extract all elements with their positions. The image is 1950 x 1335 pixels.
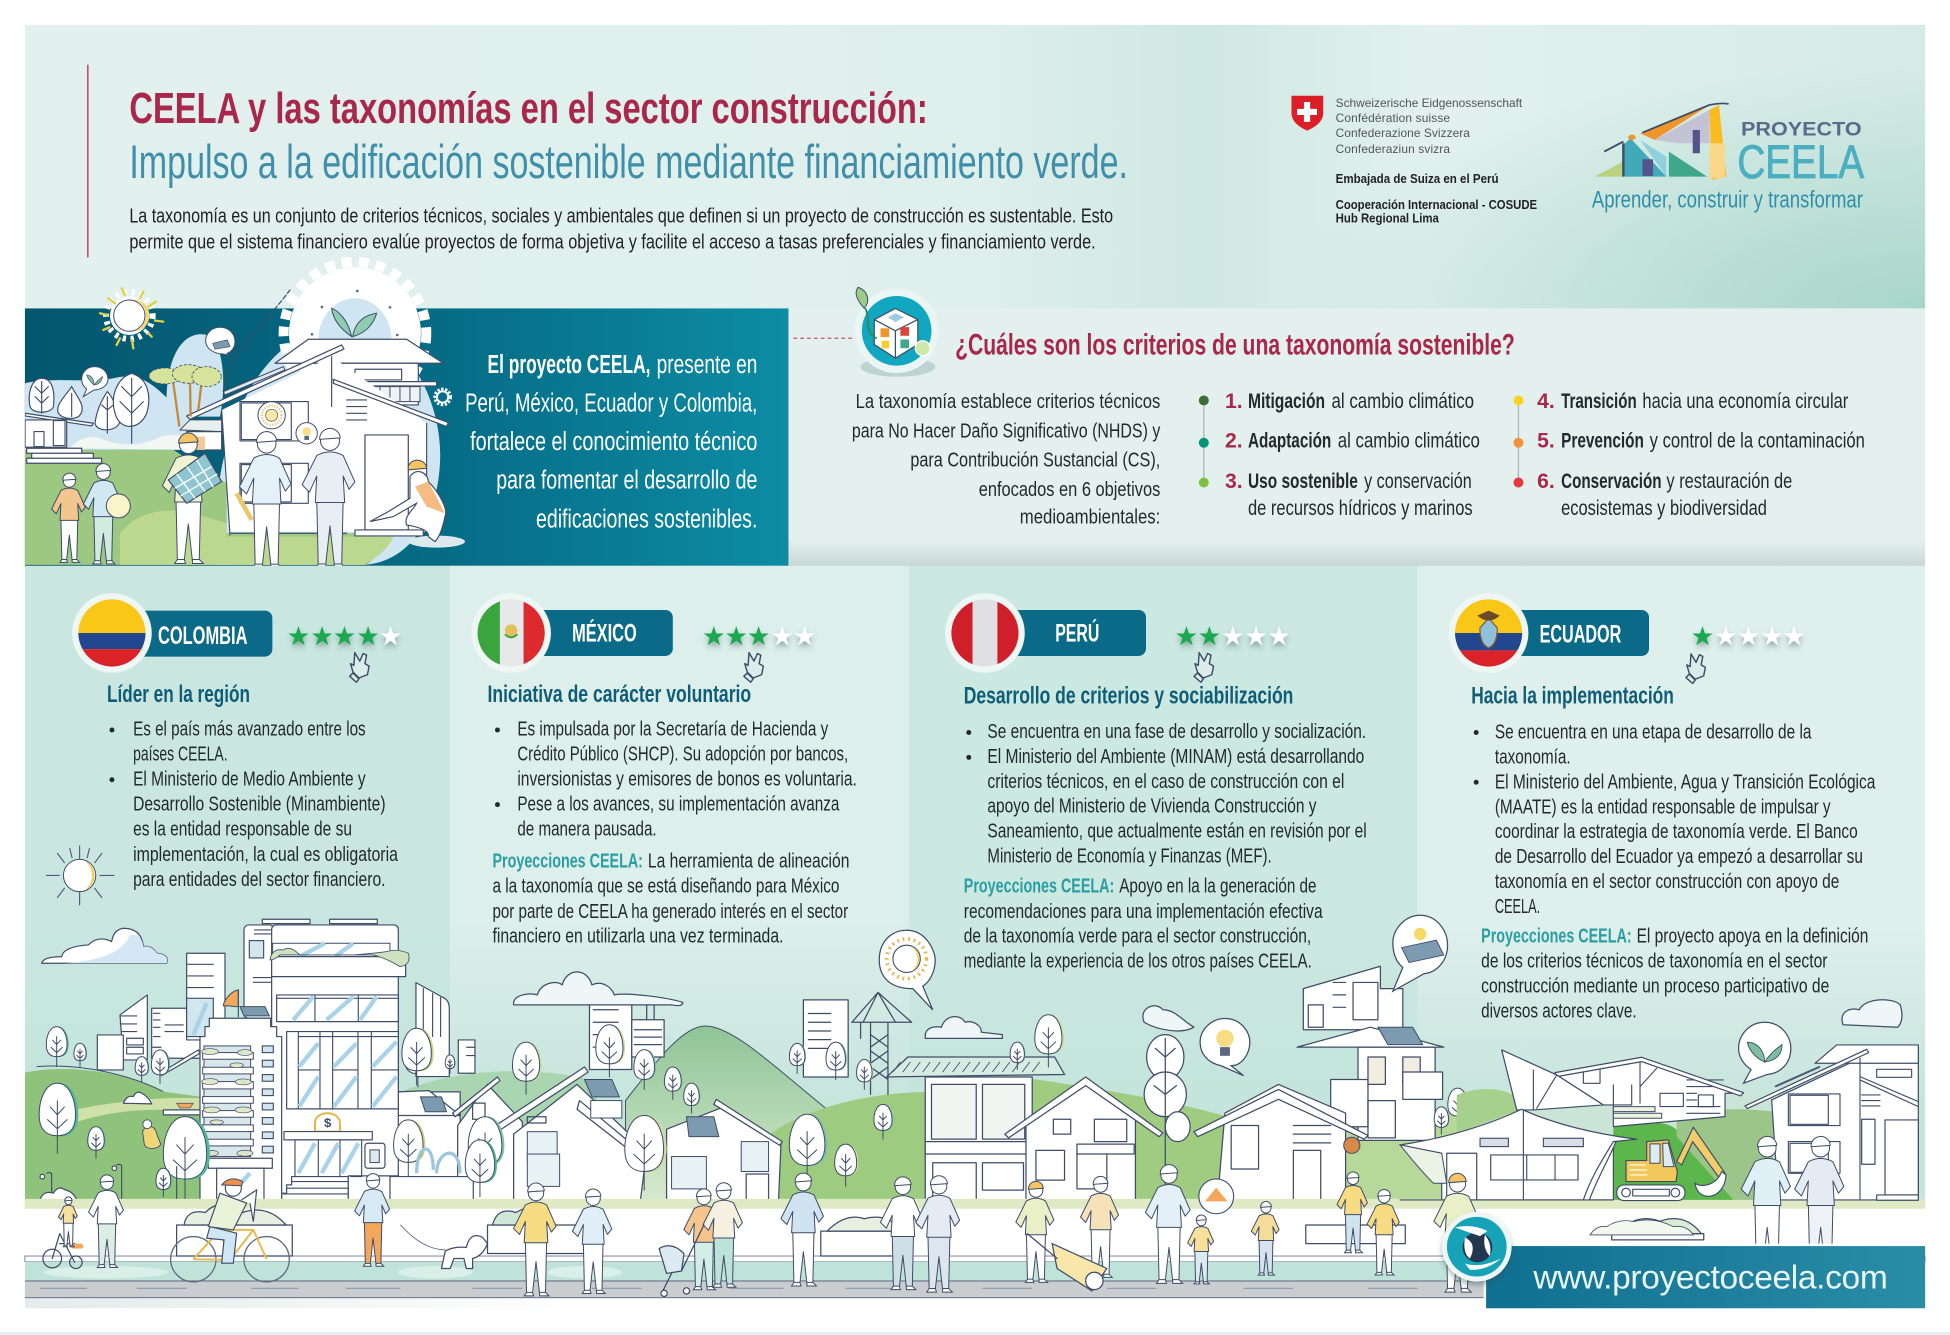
cyclist [171, 1179, 289, 1282]
list: objectives 4 to 6: hacia una economía circular [1642, 390, 1848, 413]
left small house and bricks [25, 413, 93, 426]
text: Ecuador projections [1481, 926, 1868, 1022]
list: objectives 4 to 6: ecosistemas y biodiversidad [1561, 497, 1767, 520]
heading: CEELA project description: fortalece el conocimiento técnico [470, 426, 757, 456]
small gear [435, 389, 451, 405]
connector dashed line [793, 337, 856, 339]
sun: Colombia column [46, 846, 114, 905]
logo: Swiss confederation: Confederazione Svizzera [1336, 126, 1470, 140]
pill: Perú [995, 610, 1146, 656]
text: Perú projections [964, 876, 1323, 973]
background skyline center [589, 992, 912, 1094]
text: Colombia bullets: para entidades del sector financiero. [133, 869, 386, 891]
list: objectives 1 to 3: de recursos hídricos y marinos [1248, 497, 1473, 520]
text: criteria introduction: para No Hacer Daño Significativo (NHDS) y [852, 420, 1161, 443]
text: criteria introduction: La taxonomía establece criterios técnicos [856, 390, 1160, 413]
speech bubbles [206, 327, 235, 356]
building with solar roof [1297, 966, 1444, 1140]
pill: México: MÉXICO [572, 619, 637, 648]
green fields [1613, 1122, 1733, 1200]
heading: criteria question: ¿Cuáles son los criterios de una taxonomía sostenible? [955, 328, 1515, 361]
text: Colombia bullets: implementación, la cual es obligatoria [133, 844, 399, 866]
left trees [29, 373, 149, 430]
text: Colombia bullets: Es el país más avanzado entre los [133, 719, 366, 741]
list: objectives 4 to 6: Prevención [1561, 430, 1644, 453]
worker with panel [162, 432, 204, 564]
speech bubble: seedling [1739, 1022, 1791, 1083]
footer: website bar [1484, 1244, 1925, 1308]
text: México bullets: de manera pausada. [517, 819, 657, 841]
heading: CEELA project description [465, 349, 757, 533]
heading: Ecuador: Hacia la implementación [1471, 683, 1674, 709]
list: objectives 1 to 3: Uso sostenible [1248, 470, 1358, 493]
houses center [398, 1067, 782, 1200]
sidewalk and street [25, 1199, 1925, 1308]
rating: one of five stars [1692, 626, 1804, 645]
icon: pointer hand [1686, 654, 1705, 683]
text: Colombia bullets: El Ministerio de Medio Ambiente y [133, 769, 366, 791]
text: Colombia bullets: es la entidad responsable de su [133, 819, 352, 841]
flag: Perú [945, 593, 1025, 673]
list: objectives 1 to 3: 1. [1225, 390, 1243, 413]
logo: Proyecto CEELA: PROYECTO [1741, 120, 1862, 141]
text: Perú projections: recomendaciones para una implementación efectiva [964, 901, 1323, 923]
list: objectives 4 to 6: Transición [1561, 390, 1637, 413]
logo: Swiss confederation: Confédération suisse [1336, 111, 1450, 125]
sun [110, 296, 149, 335]
heading: México: Iniciativa de carácter voluntario [488, 682, 751, 708]
distant skyline [120, 995, 147, 1060]
dog [400, 1225, 488, 1268]
fin building [416, 983, 449, 1077]
text: Ecuador bullets: (MAATE) es la entidad responsable de impulsar y [1495, 796, 1831, 818]
text: Ecuador bullets: CEELA. [1495, 896, 1540, 918]
text: México projections: por parte de CEELA ha generado interés en el sector [492, 901, 848, 923]
list: objectives 4 to 6: 4. [1537, 390, 1555, 413]
family [52, 473, 85, 562]
gear [288, 267, 421, 372]
text: Perú bullets [966, 721, 1367, 868]
text: Perú projections: Apoyo en la la generación de [1119, 876, 1316, 898]
footer: website bar: www.proyectoceela.com [1532, 1259, 1888, 1296]
clouds center [514, 972, 1902, 1038]
title block: Impulso a la edificación sostenible mediante financiamiento verde. [129, 136, 1128, 189]
list: objectives 4 to 6 [1513, 390, 1865, 520]
icon: pointer hand [350, 653, 369, 682]
front house [1400, 1109, 1637, 1200]
logo: Proyecto CEELA [1592, 103, 1865, 214]
text: criteria introduction [852, 390, 1161, 529]
text: México bullets: Crédito Público (SHCP). Su adopción por bancos, [517, 744, 848, 766]
icon: hands holding globe [1442, 1212, 1512, 1282]
street lamps [47, 1164, 177, 1207]
text: Perú bullets: Ministerio de Economía y Finanzas (MEF). [987, 846, 1272, 868]
rating: two of five stars [1176, 626, 1289, 645]
title block: La taxonomía es un conjunto de criterios técnicos, sociales y ambientales que definen si un proyecto de construcción es sustentable. Esto [129, 205, 1113, 228]
title block [129, 85, 1128, 254]
icon: pointer hand [1194, 653, 1214, 682]
child on tricycle [43, 1197, 83, 1268]
text: Perú projections: de la taxonomía verde para el sector construcción, [964, 926, 1311, 948]
illustration: right neighbourhood [1400, 1045, 1918, 1235]
cloud [42, 928, 167, 963]
speech bubble: light bulb [1200, 1019, 1250, 1076]
rating: four of five stars [288, 626, 401, 645]
title block: permite que el sistema financiero evalúe proyectos de forma objetiva y facilite el acceso a tasas preferenciales y financiamiento verde. [129, 231, 1096, 254]
text: Colombia bullets [109, 719, 399, 891]
fountain [417, 1149, 460, 1173]
bushes on grass [123, 1092, 152, 1104]
list: objectives 1 to 3: 3. [1225, 470, 1243, 493]
text: México projections: La herramienta de alineación [648, 851, 849, 873]
logo: Swiss confederation: Hub Regional Lima [1336, 212, 1439, 226]
text: Ecuador bullets: coordinar la estrategia de taxonomía verde. El Banco [1495, 821, 1858, 843]
speech bubble: sun [879, 930, 935, 1010]
list: objectives 1 to 3: al cambio climático [1338, 430, 1480, 453]
palm trees [173, 382, 202, 427]
list: objectives 4 to 6: y restauración de [1666, 470, 1792, 493]
logo: Proyecto CEELA: Aprender, construir y transformar [1592, 188, 1863, 214]
trees scattered center [404, 1015, 1469, 1200]
list: objectives 4 to 6: y control de la contaminación [1650, 430, 1865, 453]
text: Perú bullets: apoyo del Ministerio de Vivienda Construcción y [987, 796, 1317, 818]
text: Ecuador projections: construcción mediante un proceso participativo de [1481, 975, 1829, 997]
speech bubble: solar panel [1393, 915, 1448, 991]
text: criteria introduction: para Contribución Sustancial (CS), [910, 448, 1160, 471]
text: Perú bullets: Se encuentra en una fase de desarrollo y socialización. [987, 721, 1366, 743]
rating: three of five stars [704, 626, 815, 645]
text: criteria introduction: medioambientales: [1020, 506, 1160, 529]
stroller [659, 1225, 704, 1296]
wheelbarrow [1027, 1234, 1107, 1291]
text: Perú bullets: El Ministerio del Ambiente (MINAM) está desarrollando [987, 746, 1364, 768]
crane [852, 992, 912, 1094]
text: Ecuador projections: Proyecciones CEELA: [1481, 926, 1632, 948]
illustration: project house scene [25, 262, 465, 568]
flag: México [471, 593, 551, 673]
pill: México [522, 610, 673, 656]
list: objectives 1 to 3: Mitigación [1248, 390, 1325, 413]
list: objectives 4 to 6: 5. [1537, 430, 1555, 453]
list: objectives 1 to 3: al cambio climático [1332, 390, 1474, 413]
flag: Colombia [72, 593, 152, 673]
icon: rubik cube with leaf [854, 287, 939, 377]
heading: Perú: Desarrollo de criterios y sociabilización [964, 683, 1293, 709]
pill: Ecuador [1499, 610, 1649, 656]
bubble: playground [1199, 1179, 1234, 1214]
flag: Ecuador [1449, 593, 1528, 673]
pill: Colombia [124, 611, 272, 657]
logo: Proyecto CEELA: CEELA [1737, 136, 1865, 189]
panel: taxonomy criteria background [788, 308, 1925, 567]
back house [1533, 1058, 1743, 1127]
lawn [25, 450, 379, 565]
logo: Swiss confederation: Schweizerische Eidgenossenschaft [1336, 96, 1523, 110]
illustration: left city cluster: $ [324, 1116, 332, 1130]
house at basketball court [1194, 1084, 1368, 1200]
small roof house [180, 420, 222, 432]
logo: Swiss confederation: Embajada de Suiza en el Perú [1336, 172, 1499, 186]
text: México bullets: inversionistas y emisores de bonos es voluntaria. [517, 769, 857, 791]
heading: CEELA project description: edificaciones sostenibles. [536, 503, 757, 533]
text: México projections: a la taxonomía que se está diseñando para México [492, 876, 839, 898]
list: objectives 4 to 6: 6. [1537, 470, 1555, 493]
text: México projections [492, 851, 849, 948]
crouching worker [408, 536, 465, 548]
house [275, 339, 443, 363]
heading: CEELA project description: presente en [657, 349, 757, 379]
houses mid right [887, 1057, 1163, 1200]
panel: header background [25, 25, 1925, 308]
green hills center [626, 1026, 827, 1200]
pill: Colombia: COLOMBIA [158, 622, 248, 650]
right house [1772, 1048, 1918, 1200]
people on the street [89, 1136, 1844, 1296]
card: Ecuador [1449, 593, 1876, 1022]
list: objectives 1 to 3 [1199, 390, 1480, 520]
text: Perú bullets: criterios técnicos, en el caso de construcción con el [987, 771, 1344, 793]
main tower [244, 925, 274, 1018]
card: Perú [945, 593, 1367, 973]
card: México [471, 593, 857, 948]
panel: CEELA project teal [25, 308, 788, 566]
icon: pointer hand [744, 653, 763, 682]
text: Colombia bullets: países CEELA. [133, 744, 228, 766]
pill: Perú: PERÚ [1055, 618, 1099, 648]
text: Perú projections: mediante la experiencia de los otros países CEELA. [964, 951, 1312, 973]
logo: Swiss confederation: Confederaziun svizra [1336, 142, 1450, 156]
orange banner [223, 990, 238, 1007]
heading: CEELA project description: El proyecto CEELA, [488, 349, 650, 379]
gardener [142, 1120, 161, 1149]
planters on sidewalk [177, 1204, 1704, 1256]
planter greens on balcony [270, 948, 409, 967]
heading: CEELA project description: para fomentar el desarrollo de [496, 465, 757, 495]
list: objectives 1 to 3: 2. [1225, 430, 1243, 453]
card: Colombia [72, 593, 401, 891]
list: objectives 4 to 6: Conservación [1561, 470, 1662, 493]
text: Colombia bullets: Desarrollo Sostenible (Minambiente) [133, 794, 386, 816]
text: Ecuador bullets: taxonomía en el sector construcción con apoyo de [1495, 871, 1839, 893]
heading: Colombia: Líder en la región [107, 682, 250, 708]
engineer right [302, 428, 355, 568]
title block: CEELA y las taxonomías en el sector construcción: [129, 85, 928, 133]
text: México bullets: Pese a los avances, su implementación avanza [517, 794, 840, 816]
blue backdrop blobs [25, 327, 440, 565]
illustration: city background [25, 593, 1925, 1308]
planted tower [200, 1018, 282, 1200]
logo: Swiss confederation [1291, 96, 1537, 226]
trees [46, 1027, 69, 1067]
pill: Ecuador: ECUADOR [1540, 621, 1621, 649]
heading: CEELA project description: Perú, México, Ecuador y Colombia, [465, 388, 757, 418]
text: México bullets: Es impulsada por la Secretaría de Hacienda y [517, 719, 828, 741]
text: México projections: Proyecciones CEELA: [492, 851, 643, 873]
text: Ecuador bullets: taxonomía. [1495, 746, 1571, 768]
text: criteria introduction: enfocados en 6 objetivos [979, 478, 1160, 501]
text: Ecuador projections: de los criterios técnicos de taxonomía en el sector [1481, 951, 1828, 973]
engineer left [239, 432, 291, 568]
text: Perú projections: Proyecciones CEELA: [964, 876, 1114, 898]
text: México projections: financiero en utilizarla una vez terminada. [492, 926, 783, 948]
list: objectives 1 to 3: y conservación [1364, 470, 1472, 493]
text: Ecuador projections: diversos actores clave. [1481, 1000, 1637, 1022]
solar on tower [240, 1007, 269, 1016]
illustration: left city cluster [25, 919, 497, 1207]
excavator [1677, 1127, 1725, 1177]
text: Perú bullets: Saneamiento, que actualmente están en revisión por el [987, 821, 1367, 843]
accent rule [87, 65, 89, 257]
text: Ecuador projections: El proyecto apoya en la definición [1637, 926, 1868, 948]
text: México bullets [495, 719, 857, 841]
text: Ecuador bullets [1474, 721, 1876, 918]
text: Ecuador bullets: Se encuentra en una etapa de desarrollo de la [1495, 721, 1812, 743]
roof edge house behind left [160, 1050, 200, 1076]
hedge [1590, 1220, 1693, 1235]
list: objectives 1 to 3: Adaptación [1248, 430, 1331, 453]
panel: country column backgrounds [25, 566, 1925, 1219]
logo: Swiss confederation: Cooperación Internacional - COSUDE [1336, 198, 1537, 212]
hill [25, 1069, 200, 1202]
